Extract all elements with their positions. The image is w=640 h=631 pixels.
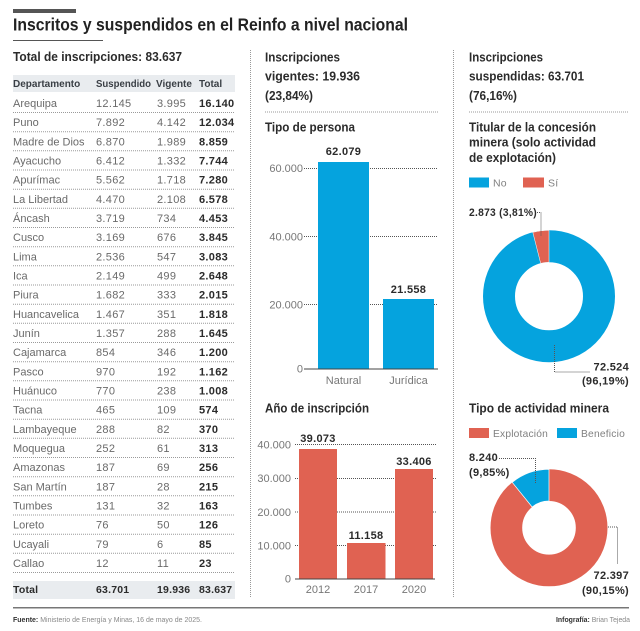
row: San Martín: San Martín	[13, 481, 67, 493]
heading: inscripciones suspendidas: Inscripciones	[469, 50, 543, 64]
heading: inscripciones vigentes: (23,84%)	[265, 88, 313, 103]
callout: 2.873	[469, 207, 541, 236]
row: Áncash: 4.453	[199, 213, 228, 225]
row: San Martín: 28	[157, 481, 170, 493]
row: Ayacucho: 1.332	[157, 156, 186, 168]
row: Amazonas: 187	[96, 462, 115, 474]
row: Cusco: 3.845	[199, 232, 228, 244]
panel: table of departments	[13, 49, 235, 599]
table header: Suspendido	[96, 79, 151, 90]
row: Pasco: Pasco	[13, 366, 44, 378]
row: Ayacucho: 6.412	[96, 156, 125, 168]
heading: inscripciones suspendidas: (76,16%)	[469, 88, 517, 103]
row: Ucayali: 6	[157, 539, 163, 551]
row: Moquegua	[13, 443, 218, 455]
row: Ucayali	[13, 539, 212, 551]
row: Total: 19.936	[157, 584, 190, 596]
heading: inscripciones vigentes: Inscripciones	[265, 50, 340, 64]
row: Madre de Dios: 1.989	[157, 136, 186, 148]
bar: Jurídica: Jurídica	[389, 375, 429, 387]
row: Lima: 547	[157, 251, 176, 263]
row: Huánuco: 238	[157, 386, 176, 398]
row: Total: Total	[13, 584, 38, 596]
bar chart: año de inscripción: 0	[285, 574, 291, 586]
heading: inscripciones vigentes: vigentes: 19.936	[265, 68, 360, 84]
row: Cajamarca: 1.200	[199, 347, 228, 359]
bar: 2017: 2017	[354, 584, 378, 596]
bar: 2020: 2020	[402, 584, 426, 596]
row: Tumbes: Tumbes	[13, 501, 53, 513]
row: Lima	[13, 251, 228, 263]
row: Tacna	[13, 405, 219, 417]
legend: actividad: Beneficio	[581, 428, 625, 440]
row: Tumbes: 32	[157, 501, 170, 513]
row: Áncash: 3.719	[96, 213, 125, 225]
table header: Total	[199, 79, 222, 90]
row: Ucayali: 79	[96, 539, 109, 551]
row: Amazonas	[13, 462, 218, 474]
bar: Natural: 62.079	[326, 146, 361, 158]
row: Tumbes	[13, 501, 218, 513]
row: Apurímac: 1.718	[157, 175, 186, 187]
callout: 72.524: (96,19%)	[582, 376, 629, 388]
bar chart: año de inscripción: 20.000	[257, 507, 291, 519]
row: Apurímac: 5.562	[96, 175, 125, 187]
bar: Jurídica: 21.558	[391, 284, 426, 296]
legend: titular	[469, 178, 558, 190]
row: Amazonas: 69	[157, 462, 170, 474]
bar chart: tipo de persona: 40.000	[269, 232, 303, 244]
row: Piura: 1.682	[96, 290, 125, 302]
row: Total: 63.701	[96, 584, 129, 596]
bar: 2020: 33.406	[396, 456, 432, 468]
row: Madre de Dios: 6.870	[96, 136, 125, 148]
heading: titular de la concesión: Titular de la concesión	[469, 120, 596, 134]
row: Huancavelica: Huancavelica	[13, 309, 80, 321]
row: Ica: 2.648	[199, 270, 228, 282]
heading: titular de la concesión: de explotación)	[469, 150, 556, 165]
row: Huánuco	[13, 386, 228, 398]
row: Total	[13, 581, 235, 599]
row: Lambayeque: 370	[199, 424, 218, 436]
row: Huánuco: Huánuco	[13, 386, 57, 398]
row: Cajamarca: 854	[96, 347, 115, 359]
row: Arequipa: 3.995	[157, 98, 186, 110]
row: Puno	[13, 117, 235, 129]
title: Inscritos y suspendidos en el Reinfo a nivel nacional	[13, 14, 408, 34]
row: Áncash	[13, 212, 228, 225]
heading: tipo de actividad minera: Tipo de actividad minera	[469, 400, 610, 416]
bar chart: tipo de persona: 0	[297, 364, 303, 376]
row: Puno: 7.892	[96, 117, 125, 129]
row: Callao	[13, 558, 212, 570]
row: Puno: Puno	[13, 117, 39, 129]
bar: 2012	[299, 433, 337, 596]
row: Cusco: 3.169	[96, 232, 125, 244]
bar: 2017: 11.158	[349, 530, 383, 542]
row: Cajamarca: 346	[157, 347, 176, 359]
bar chart: año de inscripción: 10.000	[257, 540, 291, 552]
row: Junín: Junín	[13, 328, 40, 340]
heading: año de inscripción: Año de inscripción	[265, 400, 369, 416]
table header: Departamento	[13, 79, 80, 90]
row: Callao: 11	[157, 558, 169, 570]
bar chart: año de inscripción: 40.000	[257, 440, 291, 452]
row: Madre de Dios	[13, 136, 228, 148]
row: Loreto: 50	[157, 520, 170, 532]
row: Junín	[13, 328, 228, 340]
row: Arequipa: 12.145	[96, 98, 131, 110]
heading: inscripciones suspendidas: suspendidas: 63.701	[469, 68, 584, 84]
row: Moquegua: Moquegua	[13, 443, 66, 455]
row: Apurímac: 7.280	[199, 175, 228, 187]
row: Arequipa: 16.140	[199, 98, 234, 110]
row: Apurímac: Apurímac	[13, 175, 61, 187]
row: Amazonas: Amazonas	[13, 462, 65, 474]
row: Ayacucho: 7.744	[199, 156, 229, 168]
row: La Libertad: 2.108	[157, 194, 186, 206]
row: Cajamarca: Cajamarca	[13, 347, 67, 359]
row: Tacna: 465	[96, 405, 115, 417]
row: Moquegua: 313	[199, 443, 218, 455]
bar chart: año de inscripción: 30.000	[257, 473, 291, 485]
callout: 72.397: 72.397	[594, 570, 629, 582]
callout: 8.240: 8.240	[469, 452, 498, 464]
heading: tipo de persona: Tipo de persona	[265, 120, 356, 134]
row: Huánuco: 770	[96, 386, 115, 398]
row: Arequipa: Arequipa	[13, 98, 58, 110]
table header	[13, 75, 235, 92]
row: Lima: Lima	[13, 251, 38, 263]
row: San Martín	[13, 481, 218, 493]
row: Huánuco: 1.008	[199, 386, 228, 398]
row: Huancavelica: 351	[157, 309, 176, 321]
row: Moquegua: 252	[96, 443, 115, 455]
bar: 2020	[395, 456, 433, 596]
row: Madre de Dios: Madre de Dios	[13, 136, 85, 148]
callout: 8.240: (9,85%)	[469, 467, 510, 479]
row: Lima: 3.083	[199, 251, 228, 263]
row: Ica: Ica	[13, 270, 29, 282]
row: Lambayeque: 288	[96, 424, 115, 436]
row: Lambayeque	[13, 424, 218, 436]
row: Apurímac	[13, 175, 228, 187]
bar: 2012: 39.073	[300, 433, 336, 445]
row: San Martín: 215	[199, 481, 218, 493]
row: Lima: 2.536	[96, 251, 125, 263]
row: Huancavelica	[13, 309, 228, 321]
row: Junín: 1.357	[96, 328, 125, 340]
row: La Libertad	[13, 194, 228, 206]
legend: titular: No	[493, 178, 507, 190]
callout: 72.397: (90,15%)	[582, 585, 629, 597]
row: Ica: 499	[157, 270, 176, 282]
donut chart: titular	[499, 230, 599, 346]
row: Loreto: 126	[199, 520, 218, 532]
bar: Natural: Natural	[326, 375, 361, 387]
row: Loreto: Loreto	[13, 520, 44, 532]
row: La Libertad: 6.578	[199, 194, 228, 206]
legend: actividad: Explotación	[493, 428, 548, 440]
row: Madre de Dios: 8.859	[199, 136, 228, 148]
row: Arequipa	[13, 98, 234, 110]
row: Loreto: 76	[96, 520, 109, 532]
row: Piura	[13, 290, 228, 302]
heading: total de inscripciones: Total de inscripciones: 83.637	[13, 49, 182, 64]
heading: titular de la concesión	[469, 120, 596, 165]
bar chart: tipo de persona: 60.000	[269, 163, 303, 175]
row: Tacna: Tacna	[13, 405, 43, 417]
bar chart: tipo de persona	[269, 146, 438, 387]
bar chart: tipo de persona: 20.000	[269, 300, 303, 312]
legend: titular: Sí	[548, 178, 558, 190]
row: Áncash: 734	[157, 213, 176, 225]
legend: actividad	[469, 428, 625, 440]
row: Cusco: 676	[157, 232, 176, 244]
row: Puno: 12.034	[199, 117, 235, 129]
row: Ayacucho	[13, 156, 229, 168]
row: Tumbes: 163	[199, 501, 218, 513]
row: Lambayeque: 82	[157, 424, 170, 436]
bar: Natural	[318, 146, 369, 387]
heading: titular de la concesión: minera (solo actividad	[469, 134, 596, 150]
row: Lambayeque: Lambayeque	[13, 424, 77, 436]
row: Cusco: Cusco	[13, 232, 44, 244]
row: Loreto	[13, 520, 218, 532]
callout: 8.240	[469, 452, 536, 483]
row: Pasco	[13, 366, 228, 378]
row: Tacna: 109	[157, 405, 176, 417]
row: Callao: 23	[199, 558, 212, 570]
donut chart: actividad	[506, 469, 592, 570]
row: Callao: 12	[96, 558, 109, 570]
bar chart: año de inscripción	[257, 433, 437, 596]
callout: 72.397	[582, 527, 629, 597]
row: Junín: 1.645	[199, 328, 228, 340]
row: Pasco: 192	[157, 366, 176, 378]
row: San Martín: 187	[96, 481, 115, 493]
row: Ica	[13, 270, 228, 282]
heading: inscripciones suspendidas	[469, 50, 584, 103]
callout: 72.524	[554, 345, 630, 388]
row: Ica: 2.149	[96, 270, 125, 282]
row: Áncash: Áncash	[13, 212, 50, 225]
row: La Libertad: La Libertad	[13, 194, 68, 206]
row: Huancavelica: 1.467	[96, 309, 125, 321]
callout: 2.873: 2.873 (3,81%)	[469, 207, 537, 219]
row: Piura: Piura	[13, 290, 40, 302]
row: Huancavelica: 1.818	[199, 309, 228, 321]
row: Piura: 2.015	[199, 290, 228, 302]
row: Cajamarca	[13, 347, 228, 359]
row: Moquegua: 61	[157, 443, 170, 455]
row: Ucayali: Ucayali	[13, 539, 49, 551]
row: Pasco: 1.162	[199, 366, 228, 378]
row: Callao: Callao	[13, 558, 44, 570]
bar: 2012: 2012	[306, 584, 330, 596]
row: Pasco: 970	[96, 366, 115, 378]
row: La Libertad: 4.470	[96, 194, 125, 206]
row: Amazonas: 256	[199, 462, 218, 474]
credit: Infografía: Brian Tejeda	[556, 615, 631, 624]
row: Ucayali: 85	[199, 539, 212, 551]
row: Piura: 333	[157, 290, 176, 302]
row: Ayacucho: Ayacucho	[13, 156, 61, 168]
row: Total: 83.637	[199, 584, 232, 596]
row: Cusco	[13, 232, 228, 244]
panel: inscripciones suspendidas	[469, 50, 630, 597]
bar: Jurídica	[383, 284, 434, 387]
row: Junín: 288	[157, 328, 176, 340]
row: Tacna: 574	[199, 405, 219, 417]
callout: 72.524: 72.524	[594, 362, 630, 374]
heading: inscripciones vigentes	[265, 50, 360, 103]
source note: Fuente: Ministerio de Energía y Minas, 16 de mayo de 2025.	[13, 615, 202, 624]
table header: Vigente	[156, 79, 192, 90]
panel: inscripciones vigentes	[257, 50, 439, 596]
bar: 2017	[347, 530, 386, 596]
row: Tumbes: 131	[96, 501, 115, 513]
title	[13, 9, 408, 41]
row: Puno: 4.142	[157, 117, 186, 129]
